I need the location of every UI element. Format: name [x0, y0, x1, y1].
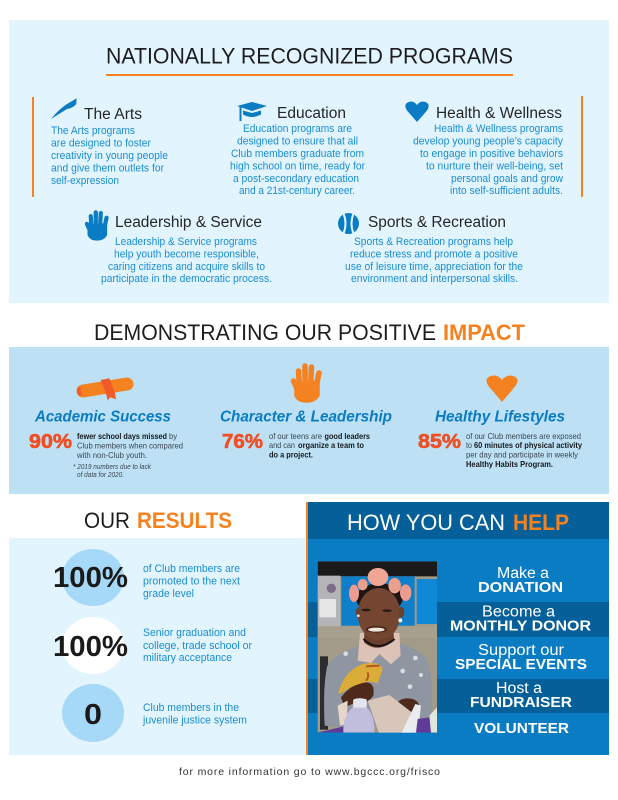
action: make a donation: [478, 565, 563, 596]
result: promotion: 100%: [53, 562, 128, 594]
program: education: Education programs are: [243, 123, 352, 135]
icon: hand: [87, 212, 107, 238]
sweater: [324, 643, 432, 727]
second hand: [398, 698, 419, 712]
photo: smiling girl with flower crown holding a taco: [318, 561, 437, 734]
icon: ball: [338, 213, 359, 234]
impact: healthy lifestyles: [418, 376, 582, 469]
impact: academic success: 90%: [29, 431, 72, 453]
impact: character and leadership: organize a team to: [298, 441, 364, 450]
result: juvenile justice: juvenile justice system: [142, 714, 247, 726]
program: education: [230, 102, 365, 197]
heading: our results: RESULTS: [137, 508, 232, 533]
program: the arts: self-expression: [51, 175, 119, 187]
icon: heart: [486, 376, 518, 402]
left accent bar: [32, 97, 34, 197]
impact: character and leadership: 76%: [222, 431, 263, 453]
impact: healthy lifestyles: of our Club members are exposed: [466, 432, 581, 441]
sweater pearls: [343, 651, 348, 656]
action: host a fundraiser: [470, 680, 572, 711]
program: the arts: [51, 98, 168, 187]
icon: paint brush: [51, 98, 76, 119]
program: the arts: are designed to foster: [51, 138, 151, 150]
action: make a donation: DONATION: [478, 579, 563, 596]
program: leadership and service: caring citizens and acquire skills to: [108, 261, 265, 273]
impact: academic success: fewer school days missed: [77, 432, 167, 441]
impact: healthy lifestyles: Healthy Lifestyles: [435, 408, 565, 426]
action: become a monthly donor: MONTHLY DONOR: [450, 618, 591, 634]
impact: character and leadership: of our teens are: [269, 432, 322, 441]
impact: healthy lifestyles: per day and participate in weekly: [466, 450, 579, 460]
impact: character and leadership: do a project.: [269, 450, 313, 460]
program: leadership and service: participate in the democratic process.: [101, 273, 272, 285]
program: leadership and service: [87, 212, 272, 285]
program: health and wellness: Health & Wellness programs: [434, 123, 564, 135]
action: support our special events: [455, 642, 587, 673]
result: juvenile justice: [62, 684, 247, 742]
panel: our results: [9, 538, 306, 755]
program: health and wellness: [405, 101, 564, 197]
program: leadership and service: Leadership & Service: [115, 214, 262, 231]
neck: [364, 632, 394, 648]
heading: how you can help: HELP: [513, 510, 569, 535]
heading: our results: [84, 508, 232, 533]
icon: diploma scroll: [77, 378, 127, 401]
result: graduation: 100%: [53, 631, 128, 663]
footer: more information: for more information go to www.bgccc.org/frisco: [179, 766, 440, 778]
impact: healthy lifestyles: 85%: [418, 431, 461, 453]
panel: positive impact: [9, 347, 609, 494]
action: volunteer: VOLUNTEER: [474, 720, 569, 737]
program: the arts: and give them outlets for: [51, 162, 164, 174]
impact: character and leadership: good leaders: [324, 432, 370, 441]
result: promotion: of Club members are: [143, 563, 240, 575]
result: graduation: military acceptance: [143, 652, 232, 664]
impact: character and leadership: and can: [269, 441, 295, 450]
action: make a donation: Make a: [497, 565, 549, 582]
program: health and wellness: Health & Wellness: [436, 105, 562, 122]
program: education: high school on time, ready for: [230, 160, 365, 172]
panel: how you can help: [306, 502, 609, 755]
action: become a monthly donor: [450, 604, 591, 634]
impact: healthy lifestyles: Healthy Habits Program.: [466, 460, 553, 469]
title: nationally recognized programs: NATIONALLY RECOGNIZED PROGRAMS: [106, 44, 513, 68]
heading: how you can help: HOW YOU CAN: [347, 510, 505, 535]
program: education: Club members graduate from: [231, 148, 364, 160]
program: education: and a 21st-century career.: [239, 185, 355, 197]
icon: heart: [405, 101, 429, 122]
impact: character and leadership: [220, 366, 392, 460]
result: graduation: [53, 617, 252, 674]
water bottle: [343, 698, 374, 733]
impact: academic success: Academic Success: [34, 408, 171, 426]
heading: demonstrating our positive impact: DEMONSTRATING OUR POSITIVE: [94, 320, 436, 345]
program: leadership and service: Leadership & Service programs: [115, 236, 258, 248]
impact: character and leadership: Character & Leadership: [220, 408, 392, 426]
program: health and wellness: to engage in positive behaviors: [420, 148, 564, 160]
result: juvenile justice: Club members in the: [143, 702, 239, 714]
impact: academic success: of data for 2020.: [77, 472, 124, 479]
impact: healthy lifestyles: to: [466, 441, 472, 450]
hand and taco: [341, 682, 374, 707]
program: health and wellness: personal goals and grow: [451, 173, 563, 185]
program: sports and recreation: environment and interpersonal skills.: [351, 273, 518, 285]
program: health and wellness: into self-sufficient adults.: [450, 185, 563, 197]
program: education: designed to ensure that all: [237, 136, 358, 148]
program: sports and recreation: Sports & Recreation: [368, 214, 506, 231]
action: support our special events: SPECIAL EVENTS: [455, 656, 587, 673]
result: promotion: [53, 549, 240, 606]
program: sports and recreation: use of leisure time, appreciation for the: [345, 261, 523, 273]
impact: healthy lifestyles: 60 minutes of physical activity: [474, 441, 582, 450]
hair: [356, 584, 403, 606]
impact: academic success: by: [169, 432, 178, 441]
result: graduation: Senior graduation and: [143, 627, 246, 639]
impact: academic success: with non-Club youth.: [76, 451, 147, 460]
heading: demonstrating our positive impact: IMPACT: [443, 320, 526, 345]
program: health and wellness: to nurture their well-being, set: [426, 160, 563, 172]
action: support our special events: Support our: [478, 642, 564, 659]
result: juvenile justice: 0: [84, 699, 102, 731]
program: sports and recreation: [338, 213, 523, 285]
wrappers and tray: [338, 701, 348, 726]
panel: nationally recognized programs: [9, 20, 609, 303]
action: host a fundraiser: FUNDRAISER: [470, 694, 572, 711]
result: graduation: college, trade school or: [143, 640, 252, 652]
program: education: a post-secondary education: [233, 173, 359, 185]
impact: academic success: Club members when compared: [77, 442, 183, 450]
program: sports and recreation: Sports & Recreation programs help: [354, 236, 513, 248]
collar: [358, 633, 401, 664]
program: sports and recreation: reduce stress and promote a positive: [350, 248, 518, 260]
result: promotion: grade level: [143, 588, 194, 600]
program: education: Education: [277, 105, 346, 122]
result: promotion: promoted to the next: [143, 576, 240, 588]
impact: academic success: * 2019 numbers due to lack: [73, 464, 151, 471]
icon: graduation cap: [237, 102, 267, 121]
flower crown: [349, 585, 359, 602]
program: leadership and service: help youth become responsible,: [114, 248, 259, 260]
right accent bar: [581, 96, 583, 197]
action: host a fundraiser: Host a: [496, 680, 542, 697]
program: the arts: The Arts: [84, 106, 142, 123]
icon: hand: [294, 366, 319, 400]
face: [358, 588, 400, 640]
program: health and wellness: develop young people’s capacity: [413, 136, 564, 148]
action: become a monthly donor: Become a: [482, 604, 555, 620]
heading: our results: OUR: [84, 508, 130, 533]
program: the arts: creativity in young people: [51, 150, 168, 162]
program: the arts: The Arts programs: [51, 125, 136, 137]
impact: academic success: [29, 378, 183, 479]
